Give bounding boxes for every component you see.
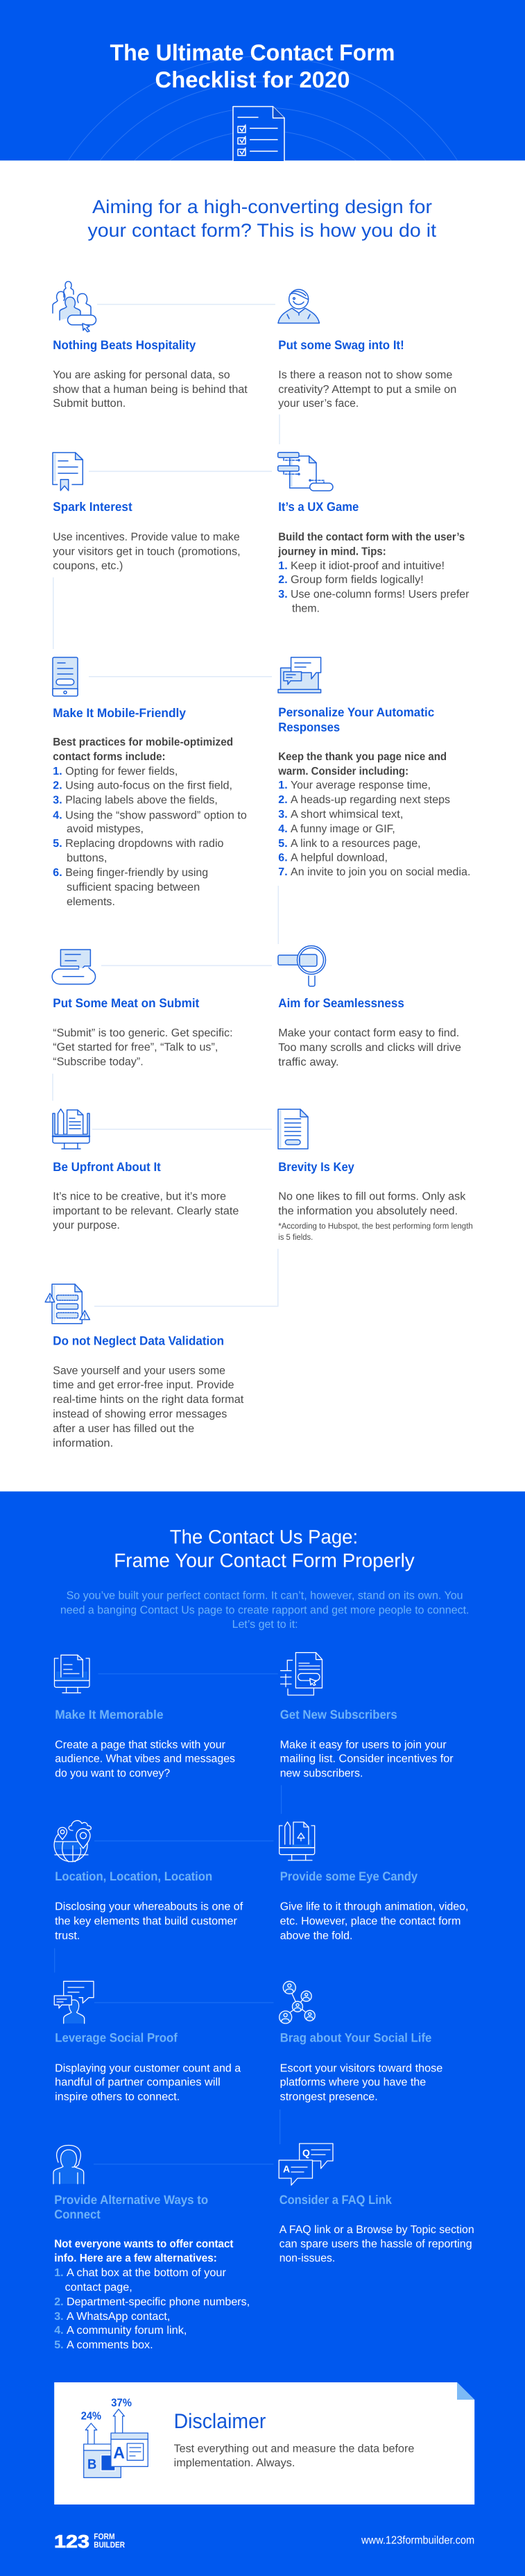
text block: A link to a resources page, (291, 838, 420, 850)
heading: Leverage Social Proof (55, 2031, 178, 2045)
heading: Provide Alternative Ways to (54, 2193, 208, 2207)
text block: info. Here are a few alternatives: (54, 2253, 217, 2264)
text block: instead of showing error messages (53, 1408, 227, 1420)
icon: UX flow document (278, 453, 333, 491)
text block: Use one-column forms! Users prefer (291, 589, 470, 600)
text block: section intro (60, 1590, 469, 1631)
footnote (278, 1221, 473, 1242)
title: Checklist for 2020 (155, 67, 350, 92)
panel: header banner (0, 0, 525, 161)
text block (279, 2224, 474, 2264)
text block: An invite to join you on social media. (291, 866, 470, 878)
heading: Nothing Beats Hospitality (53, 338, 196, 352)
panel: It's a UX Game (277, 453, 470, 615)
text block (278, 369, 456, 410)
text block: Not everyone wants to offer contact (54, 2238, 234, 2250)
heading: Put some Swag into It! (278, 338, 404, 352)
connector: submit to upfront (52, 1074, 53, 1101)
panel: Aim for Seamlessness (278, 945, 461, 1068)
heading: Make It Memorable (55, 1708, 164, 1721)
panel: Spark Interest (53, 453, 241, 572)
heading: Aim for Seamlessness (278, 996, 404, 1010)
icon: magnifier over form field (278, 945, 326, 986)
text block: It’s nice to be creative, but it’s more (53, 1190, 226, 1202)
connector: spark to UX game (89, 471, 272, 472)
text block: journey in mind. Tips: (277, 546, 386, 557)
footer: logo: 123 (54, 2531, 89, 2552)
text block (280, 1739, 454, 1779)
text block: your user’s face. (278, 398, 359, 410)
text block: 3. (278, 589, 288, 600)
text block: creativity? Attempt to put a smile on (278, 384, 456, 396)
text block: A heads-up regarding next steps (291, 794, 450, 806)
text block: Best practices for mobile-optimized (53, 736, 233, 748)
text block: A short whimsical text, (291, 809, 403, 820)
text block: Submit button. (53, 398, 126, 410)
text block: “Submit” is too generic. Get specific: (53, 1027, 233, 1039)
text block: implementation. Always. (174, 2457, 295, 2469)
connector: submit to seamlessness (101, 965, 272, 966)
text block: inspire others to connect. (55, 2091, 180, 2103)
text block: Save yourself and your users some (53, 1365, 225, 1377)
text block (53, 369, 248, 410)
text block: Keep the thank you page nice and (278, 751, 447, 763)
text block: Placing labels above the fields, (65, 795, 218, 807)
connector: hospitality to swag (97, 304, 275, 305)
icon: monitor with document (54, 1655, 89, 1693)
text block: Using auto-focus on the first field, (65, 780, 232, 792)
text block: Replacing dropdowns with radio (65, 838, 224, 850)
icon: A/B test windows: A (113, 2443, 125, 2462)
icon: A/B test windows: 24% (81, 2411, 101, 2423)
text block: 2. (54, 2296, 64, 2308)
text block: contact forms include: (53, 751, 166, 763)
text block: 1. (53, 766, 62, 777)
panel: Location, Location, Location (54, 1821, 243, 1942)
text block (53, 1027, 233, 1068)
text block: real-time hints on the right data format (53, 1394, 244, 1406)
icon: monitor with pencil and image (279, 1822, 315, 1860)
text block: platforms where you have the (280, 2076, 426, 2088)
text block: section intro: Let’s get to it: (232, 1619, 298, 1631)
heading: Personalize Your Automatic (278, 705, 434, 719)
icon: laptop with chat bubbles (278, 657, 321, 693)
text block: 1. (278, 780, 288, 791)
icon: people and button (53, 282, 96, 332)
icon: certificate document (53, 453, 83, 491)
panel: Brag about Your Social Life (279, 1981, 442, 2103)
connector: spark to mobile (53, 578, 54, 649)
icon: signup document with cursor (281, 1653, 322, 1695)
text block: A chat box at the bottom of your (67, 2267, 227, 2279)
text block: 4. (54, 2325, 64, 2337)
footnote: *According to Hubspot, the best performing form length (278, 1221, 473, 1231)
connector: personalize to seamlessness (277, 886, 279, 944)
text block (55, 2062, 241, 2103)
text block: 4. (53, 809, 62, 821)
text block: 2. (53, 780, 62, 792)
heading: Provide some Eye Candy (280, 1869, 418, 1883)
panel: blue Contact Us section background (0, 1491, 525, 2576)
heading: intro question: Aiming for a high-converting design for (92, 196, 432, 217)
text block: contact page, (65, 2282, 132, 2293)
panel: Brevity Is Key (278, 1109, 473, 1242)
icon: Q and A chat bubbles: A (283, 2163, 290, 2174)
icon: globe with pins and cloud (54, 1821, 91, 1862)
text block (277, 531, 470, 615)
connector: location to social proof (54, 1948, 55, 1973)
icon: monitor with pencil and document (53, 1109, 89, 1149)
text block: 7. (278, 866, 288, 878)
text block: Keep it idiot-proof and intuitive! (291, 560, 445, 572)
connector: subscribers to eye candy (281, 1785, 282, 1814)
text block: 3. (54, 2311, 64, 2323)
panel: Make It Mobile-Friendly (53, 657, 247, 908)
heading: The Contact Us Page (114, 1526, 415, 1571)
heading: The Contact Us Page: The Contact Us Page: (170, 1526, 358, 1547)
text block: audience. What vibes and messages (55, 1753, 235, 1765)
icon: A/B test windows (81, 2398, 148, 2477)
text block: A helpful download, (291, 852, 388, 864)
connector: mobile to personalize (89, 676, 272, 677)
panel: Put Some Meat on Submit (52, 950, 233, 1068)
icon: support agent with headset (53, 2145, 84, 2184)
text block: Being finger-friendly by using (65, 867, 208, 879)
icon: person with chat bubbles (54, 1981, 94, 2023)
text block: elements. (67, 896, 115, 908)
text block (280, 1901, 469, 1942)
icon: checklist document (233, 107, 284, 161)
panel: Nothing Beats Hospitality (53, 282, 248, 410)
text block: 1. (278, 560, 288, 572)
text block: non-issues. (279, 2253, 335, 2264)
text block: sufficient spacing between (67, 882, 200, 893)
heading: Spark Interest (53, 500, 132, 514)
footer: logo (54, 2531, 125, 2552)
heading: It’s a UX Game (278, 500, 359, 514)
connector: social proof to social life (94, 2002, 273, 2003)
text block: Is there a reason not to show some (278, 369, 452, 381)
text block: trust. (55, 1930, 80, 1942)
panel: Do not Neglect Data Validation (45, 1284, 244, 1449)
panel: Put some Swag into It (278, 289, 456, 410)
text block: 5. (278, 838, 288, 850)
text block: 2. (278, 574, 288, 586)
text block: section intro: So you’ve built your perfect contact form. It can’t, however, stand on its own. You (67, 1590, 463, 1601)
icon: Q and A chat bubbles: Q (302, 2148, 310, 2159)
text block: them. (292, 603, 320, 615)
title (110, 40, 395, 92)
panel: Provide Alternative Ways to Connect (53, 2145, 250, 2351)
icon: Q and A chat bubbles (279, 2144, 333, 2185)
heading line 2: Responses (278, 720, 340, 734)
text block: new subscribers. (280, 1767, 363, 1779)
text block: can spare users the hassle of reporting (279, 2238, 472, 2250)
text block (53, 1190, 239, 1231)
text block: after a user has filled out the (53, 1423, 194, 1435)
text block: warm. Consider including: (277, 766, 408, 777)
text block: Your average response time, (291, 780, 431, 791)
text block: section intro: need a banging Contact Us page to create rapport and get more people to connect. (60, 1604, 469, 1616)
text block: Test everything out and measure the data before (174, 2443, 414, 2455)
text block: show that a human being is behind that (53, 384, 248, 396)
heading: Do not Neglect Data Validation (53, 1334, 224, 1348)
heading: intro question (87, 196, 437, 241)
text block: Opting for fewer fields, (65, 766, 178, 777)
text block: Disclosing your whereabouts is one of (55, 1901, 243, 1913)
icon: smiling person (278, 289, 319, 323)
heading: Brevity Is Key (278, 1160, 354, 1174)
heading (54, 2193, 208, 2221)
connector: upfront to brevity (92, 1129, 272, 1130)
footer: website: www.123formbuilder.com (361, 2534, 474, 2546)
connector: social life to FAQ (279, 2110, 281, 2144)
connector: brevity to data validation (94, 1249, 278, 1306)
connector: alternatives to FAQ (94, 2164, 273, 2165)
icon: A/B test windows: B (87, 2457, 96, 2473)
text block: Using the “show password” option to (65, 809, 247, 821)
text block: 6. (278, 852, 288, 864)
text block: A FAQ link or a Browse by Topic section (279, 2224, 474, 2236)
panel: Personalize Your Automatic Responses (277, 657, 470, 878)
text block: A WhatsApp contact, (67, 2311, 170, 2323)
text block: Group form fields logically! (291, 574, 424, 586)
footer: logo: BUILDER (94, 2540, 125, 2550)
text block: Make it easy for users to join your (280, 1739, 447, 1751)
panel: Make It Memorable (54, 1655, 235, 1779)
text block: traffic away. (278, 1057, 339, 1068)
panel: Be Upfront About It (53, 1109, 239, 1231)
text block: your purpose. (53, 1220, 120, 1231)
text block: 5. (53, 838, 62, 850)
text block: 3. (278, 809, 288, 820)
text block: the information you absolutely need. (278, 1205, 458, 1217)
text block: buttons, (67, 852, 107, 864)
panel: Provide some Eye Candy (279, 1822, 469, 1942)
heading: Connect (54, 2207, 101, 2221)
text block: strongest presence. (280, 2091, 378, 2103)
text block: Department-specific phone numbers, (67, 2296, 250, 2308)
text block (280, 2062, 442, 2103)
text block (278, 1190, 466, 1217)
panel: Consider a FAQ Link (279, 2144, 474, 2264)
heading: Brag about Your Social Life (280, 2031, 431, 2045)
heading: Get New Subscribers (280, 1708, 397, 1721)
icon: connected people network (279, 1981, 315, 2023)
text block: Escort your visitors toward those (280, 2062, 442, 2074)
panel: Leverage Social Proof (54, 1981, 241, 2103)
text block: your visitors get in touch (promotions, (53, 546, 241, 557)
text block: A comments box. (67, 2339, 153, 2351)
icon: form with warnings (45, 1284, 89, 1324)
text block: “Get started for free”, “Talk to us”, (53, 1041, 218, 1053)
text block: coupons, etc.) (53, 560, 123, 572)
heading: Location, Location, Location (55, 1869, 212, 1883)
title: The Ultimate Contact Form (110, 40, 395, 65)
text block: A funny image or GIF, (291, 823, 395, 835)
text block: Create a page that sticks with your (55, 1739, 226, 1751)
text block: Make your contact form easy to find. (278, 1027, 459, 1039)
panel: Get New Subscribers (280, 1653, 454, 1779)
text block: You are asking for personal data, so (53, 369, 230, 381)
text block: information. (53, 1438, 113, 1449)
text block (278, 1027, 461, 1068)
text block: Use incentives. Provide value to make (53, 531, 240, 543)
text block: Displaying your customer count and a (55, 2062, 241, 2074)
footnote: is 5 fields. (278, 1232, 313, 1242)
text block: important to be relevant. Clearly state (53, 1205, 239, 1217)
text block: Give life to it through animation, video, (280, 1901, 469, 1913)
text block (55, 1739, 235, 1779)
icon: phone (53, 657, 78, 696)
heading: Make It Mobile-Friendly (53, 706, 186, 720)
text block: handful of partner companies will (55, 2076, 221, 2088)
text block (55, 1901, 243, 1942)
heading: Put Some Meat on Submit (53, 996, 199, 1010)
heading: The Contact Us Page: Frame Your Contact Form Properly (114, 1549, 415, 1571)
text block (54, 2238, 250, 2351)
text block: avoid mistypes, (67, 823, 144, 835)
text block (277, 751, 470, 878)
text block: “Subscribe today”. (53, 1056, 144, 1068)
text block: No one likes to fill out forms. Only ask (278, 1190, 466, 1202)
connector: memorable to subscribers (98, 1673, 278, 1674)
text block: 6. (53, 867, 62, 879)
text block: 1. (54, 2267, 64, 2279)
footer: logo: FORM (94, 2532, 115, 2541)
icon: button with speech bubble (52, 950, 96, 984)
text block: etc. However, place the contact form (280, 1916, 461, 1928)
text block: do you want to convey? (55, 1767, 170, 1779)
icon: A/B test windows: 37% (111, 2398, 132, 2409)
text block (53, 1365, 244, 1449)
heading: Be Upfront About It (53, 1160, 161, 1174)
text block (174, 2443, 414, 2469)
heading: Disclaimer (174, 2410, 266, 2433)
connector: location to eye candy (94, 1840, 273, 1842)
panel: disclaimer card (54, 2382, 474, 2505)
text block (53, 736, 247, 908)
text block: 3. (53, 795, 62, 807)
text block: 5. (54, 2339, 64, 2351)
text block: 4. (278, 823, 288, 835)
text block: Too many scrolls and clicks will drive (278, 1042, 461, 1054)
connector: swag to UX game (279, 414, 280, 444)
text block: 2. (278, 794, 288, 806)
text block: A community forum link, (67, 2325, 187, 2337)
text block (53, 531, 241, 572)
text block: Build the contact form with the user’s (278, 531, 465, 543)
heading: intro question: your contact form? This is how you do it (87, 220, 437, 241)
text block: mailing list. Consider incentives for (280, 1753, 454, 1765)
text block: time and get error-free input. Provide (53, 1379, 234, 1391)
text block: the key elements that build customer (55, 1916, 238, 1928)
heading: Consider a FAQ Link (279, 2193, 393, 2207)
text block: above the fold. (280, 1930, 352, 1942)
icon: short form document (278, 1109, 308, 1149)
